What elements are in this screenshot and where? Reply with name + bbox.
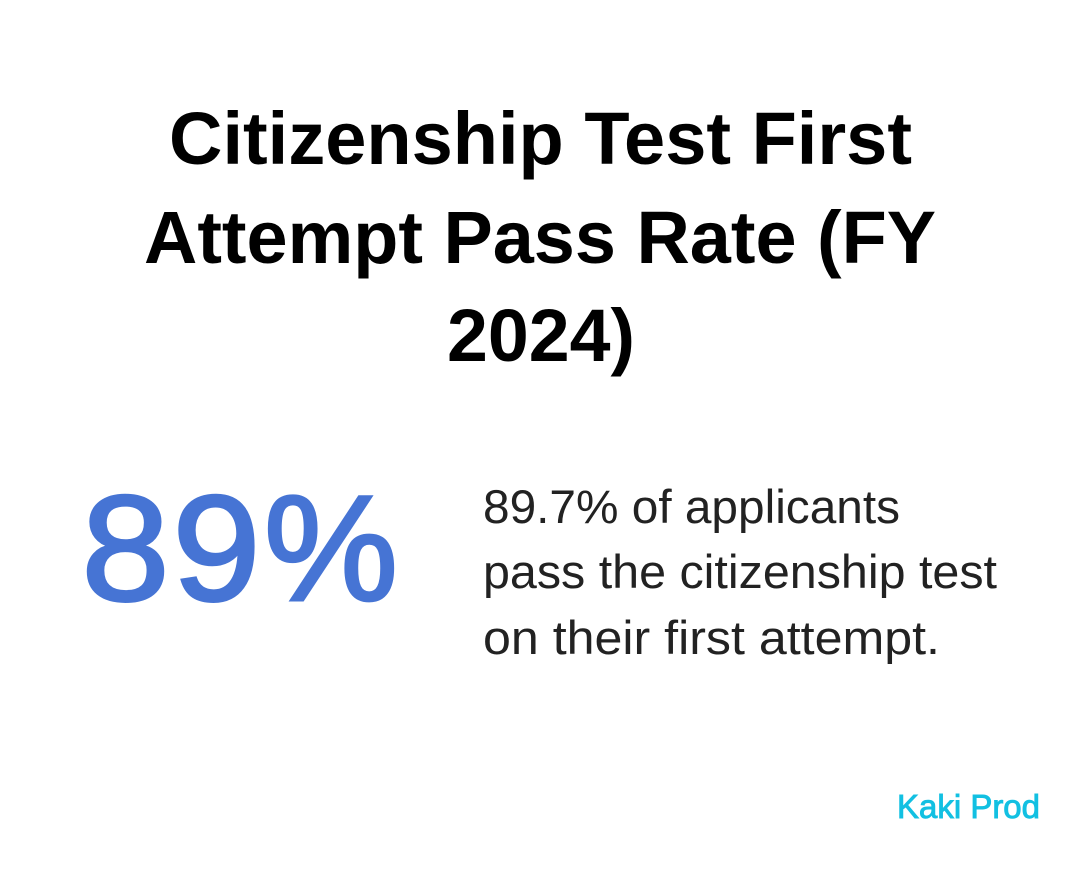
title: Citizenship Test First bbox=[169, 97, 912, 180]
big statistic: 89%: 8 bbox=[82, 464, 170, 632]
title: 2024) bbox=[447, 294, 635, 377]
big statistic: 89% bbox=[82, 464, 398, 632]
description text: 89.7% of applicants bbox=[483, 480, 900, 533]
title: Attempt Pass Rate (FY bbox=[144, 196, 936, 279]
description text: on their first attempt. bbox=[483, 611, 940, 664]
big statistic: 89%: 9 bbox=[172, 464, 260, 632]
logo: Kaki Prod: Kaki Prod bbox=[897, 788, 1040, 825]
description text bbox=[483, 480, 997, 664]
title bbox=[144, 97, 936, 377]
description text: pass the citizenship test bbox=[483, 545, 997, 598]
big statistic: 89%: % bbox=[264, 464, 398, 632]
